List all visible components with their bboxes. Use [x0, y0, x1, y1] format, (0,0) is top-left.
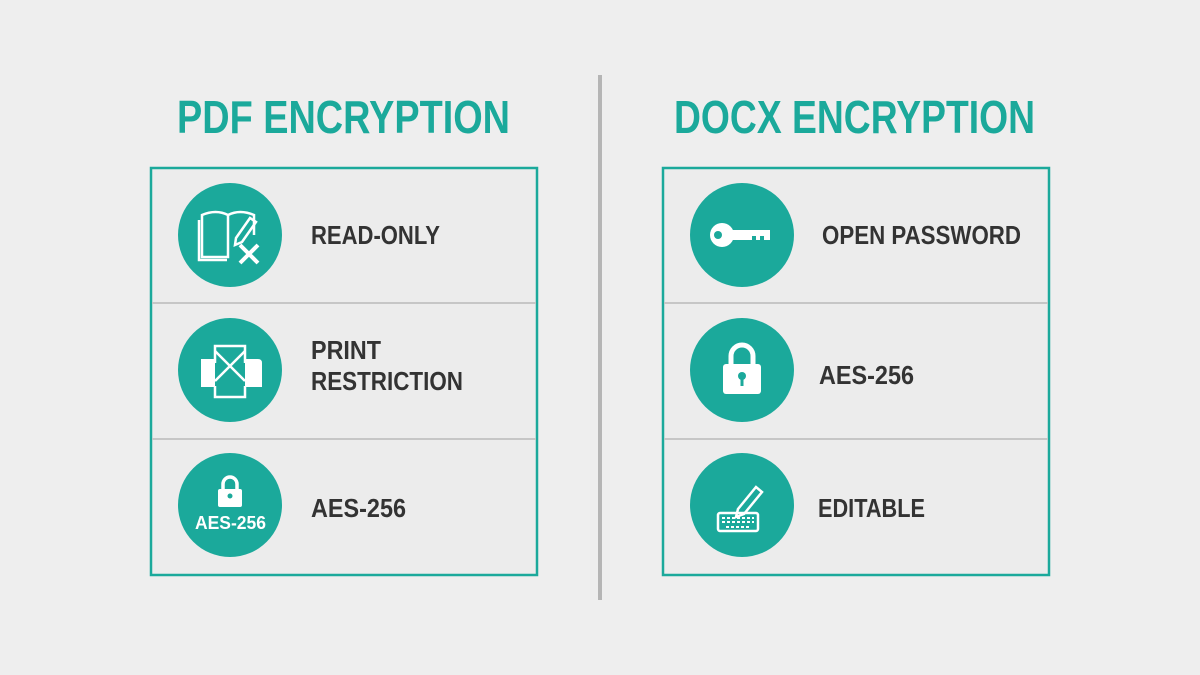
title: DOCX encryption: DOCX ENCRYPTION [674, 91, 1035, 143]
icon: printer with x [178, 318, 282, 422]
text: AES-256: AES-256 [819, 360, 914, 390]
panel: PDF [151, 168, 537, 575]
text: AES-256: AES-256 [311, 493, 406, 523]
panel: DOCX [663, 168, 1049, 575]
icon: book with pencil and x [178, 183, 282, 287]
icon: key [690, 183, 794, 287]
title: PDF encryption: PDF ENCRYPTION [177, 91, 510, 143]
text: editable: EDITABLE [818, 493, 925, 523]
icon: lock with AES-256: AES-256 [195, 513, 266, 533]
text: open password: OPEN PASSWORD [822, 220, 1021, 250]
icon: padlock [690, 318, 794, 422]
text: read-only: READ-ONLY [311, 220, 440, 250]
icon: lock with AES-256 [178, 453, 282, 557]
panel: PDF: RESTRICTION [311, 366, 463, 396]
text: print restriction: PRINT [311, 335, 381, 365]
icon: keyboard with pencil [690, 453, 794, 557]
